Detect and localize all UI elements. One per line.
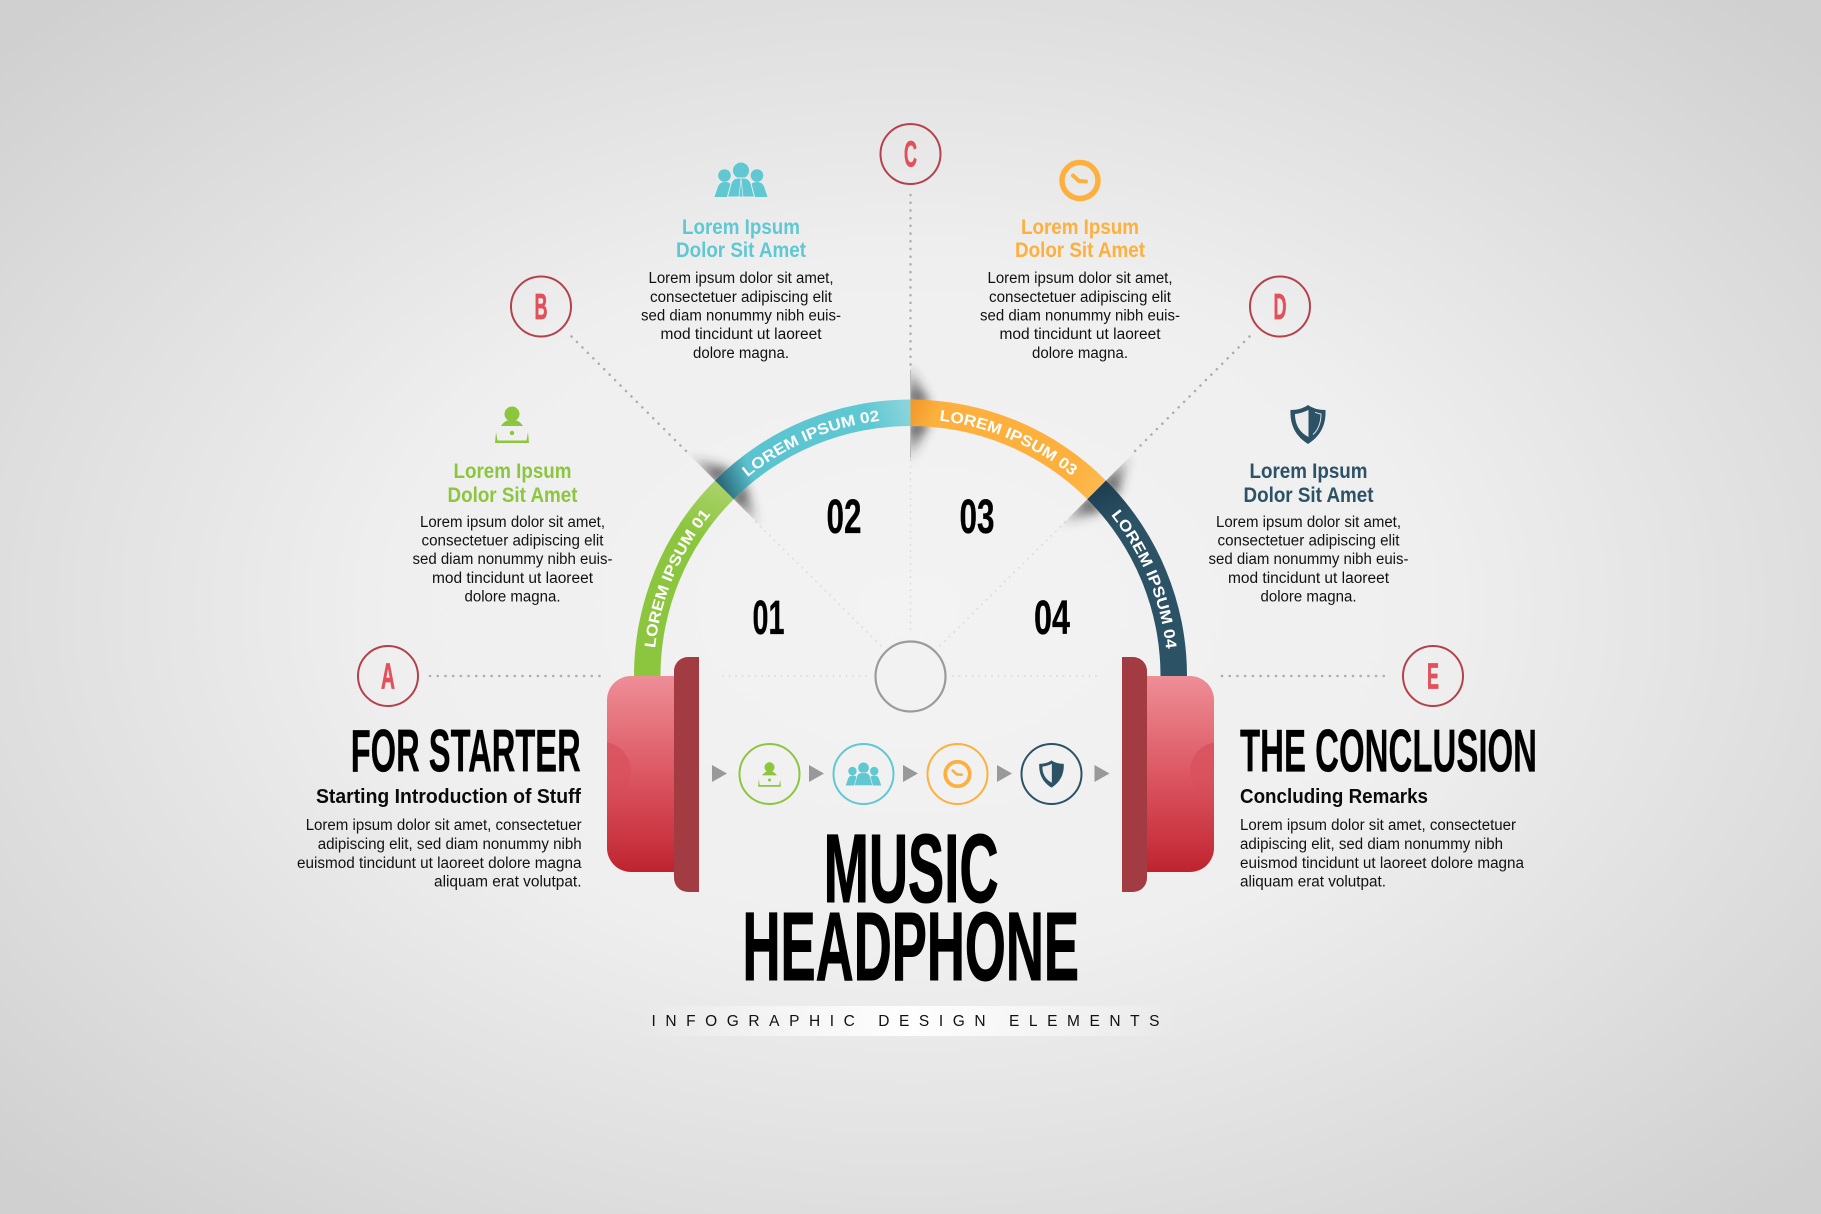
panel: for starter (297, 718, 582, 890)
subheading: Starting Introduction of Stuff (316, 786, 581, 808)
band segment 04: LOREM IPSUM 04 (1112, 509, 1177, 649)
right ear cup (1122, 657, 1214, 892)
number 02: 02 (826, 491, 862, 544)
text block: Lorem ipsum dolor sit amet, (988, 270, 1172, 287)
arrow (712, 765, 727, 782)
heading: Dolor Sit Amet (676, 239, 806, 262)
text block: euismod tincidunt ut laoreet dolore magna (297, 855, 582, 872)
joint shadows (692, 366, 1132, 526)
number 04: 04 (1034, 592, 1070, 645)
text block: aliquam erat volutpat. (434, 874, 582, 890)
icon: people (714, 162, 768, 197)
heading (1015, 216, 1145, 262)
text block (980, 270, 1180, 362)
left ear cup (607, 657, 699, 892)
text block: aliquam erat volutpat. (1240, 874, 1386, 890)
text block: dolore magna. (693, 345, 789, 362)
band segment 03 (910, 400, 1106, 500)
marker E (1403, 646, 1463, 706)
band segment 02 (715, 400, 910, 500)
title: HEADPHONE (742, 892, 1079, 1001)
heading: Lorem Ipsum (1250, 460, 1368, 483)
text block: Lorem ipsum dolor sit amet, (1216, 514, 1401, 531)
heading (676, 216, 806, 262)
step: people (834, 744, 894, 804)
title: MUSIC (824, 814, 999, 923)
text block (641, 270, 841, 362)
text block: consectetuer adipiscing elit (422, 532, 604, 550)
marker A (358, 646, 418, 706)
arrow (809, 765, 824, 782)
title (742, 814, 1079, 1001)
marker B (511, 276, 571, 336)
band segment 03: LOREM IPSUM 03 (940, 410, 1077, 475)
band segment 01: LOREM IPSUM 01 (644, 510, 710, 648)
panel: block 02 (641, 162, 841, 362)
marker A: A (381, 656, 395, 696)
text block: mod tincidunt ut laoreet (1000, 326, 1161, 343)
text block: consectetuer adipiscing elit (650, 289, 833, 306)
text block: adipiscing elit, sed diam nonummy nibh (318, 836, 582, 853)
text block: mod tincidunt ut laoreet (1228, 570, 1390, 587)
text block: dolore magna. (1260, 588, 1356, 606)
text block: adipiscing elit, sed diam nonummy nibh (1240, 836, 1503, 853)
band segment 04 (1087, 480, 1187, 676)
panel: block 04 (1208, 405, 1408, 606)
text block (1240, 817, 1524, 890)
marker B: B (534, 286, 548, 327)
icon: user (495, 406, 529, 443)
text block: Lorem ipsum dolor sit amet, (420, 514, 605, 531)
panel: block 01 (412, 406, 612, 606)
step: shield (1022, 744, 1082, 804)
marker D: D (1274, 286, 1286, 327)
heading: THE CONCLUSION (1240, 718, 1537, 784)
panel: the conclusion (1240, 718, 1537, 890)
marker D (1250, 276, 1310, 336)
text block (297, 817, 582, 890)
heading: Dolor Sit Amet (448, 484, 578, 507)
text block (1208, 514, 1408, 606)
band segment 01 (634, 480, 734, 676)
text block: dolore magna. (464, 588, 560, 606)
number 03: 03 (960, 491, 994, 544)
arrow (903, 765, 918, 782)
heading: Dolor Sit Amet (1244, 484, 1374, 507)
heading: Dolor Sit Amet (1015, 239, 1145, 262)
marker C: C (904, 134, 917, 174)
heading: Lorem Ipsum (682, 216, 800, 239)
heading: FOR STARTER (351, 718, 581, 784)
text block: Lorem ipsum dolor sit amet, consectetuer (1240, 817, 1516, 834)
arrow (1094, 765, 1110, 782)
heading: Lorem Ipsum (1021, 216, 1139, 239)
text block: mod tincidunt ut laoreet (432, 570, 594, 587)
marker C (880, 124, 940, 184)
text block: sed diam nonummy nibh euis- (641, 308, 841, 324)
icon: shield (1290, 405, 1326, 444)
step: clock (928, 744, 988, 804)
text block: dolore magna. (1032, 345, 1128, 362)
arrow (997, 765, 1012, 782)
subtitle (640, 1006, 1180, 1036)
process row (712, 744, 1110, 804)
text block: consectetuer adipiscing elit (1218, 532, 1400, 550)
band segment 02: LOREM IPSUM 02 (742, 410, 880, 477)
marker E: E (1427, 656, 1439, 696)
subtitle: INFOGRAPHIC DESIGN ELEMENTS (652, 1013, 1160, 1030)
text block: consectetuer adipiscing elit (989, 289, 1172, 306)
heading (448, 460, 578, 507)
headband arc (634, 400, 1187, 676)
text block: sed diam nonummy nibh euis- (980, 308, 1180, 324)
text block: sed diam nonummy nibh euis- (412, 551, 612, 568)
step: user (740, 744, 800, 804)
heading (1244, 460, 1374, 507)
text block: sed diam nonummy nibh euis- (1208, 551, 1408, 568)
center circle (876, 642, 946, 712)
subheading: Concluding Remarks (1240, 786, 1428, 808)
text block: euismod tincidunt ut laoreet dolore magna (1240, 855, 1524, 872)
number 01: 01 (752, 592, 784, 645)
text block: Lorem ipsum dolor sit amet, consectetuer (306, 817, 582, 834)
text block: mod tincidunt ut laoreet (660, 326, 822, 343)
text block (412, 514, 612, 606)
icon: clock (1062, 162, 1098, 198)
text block: Lorem ipsum dolor sit amet, (648, 270, 834, 287)
heading: Lorem Ipsum (454, 460, 572, 483)
panel: block 03 (980, 162, 1180, 362)
